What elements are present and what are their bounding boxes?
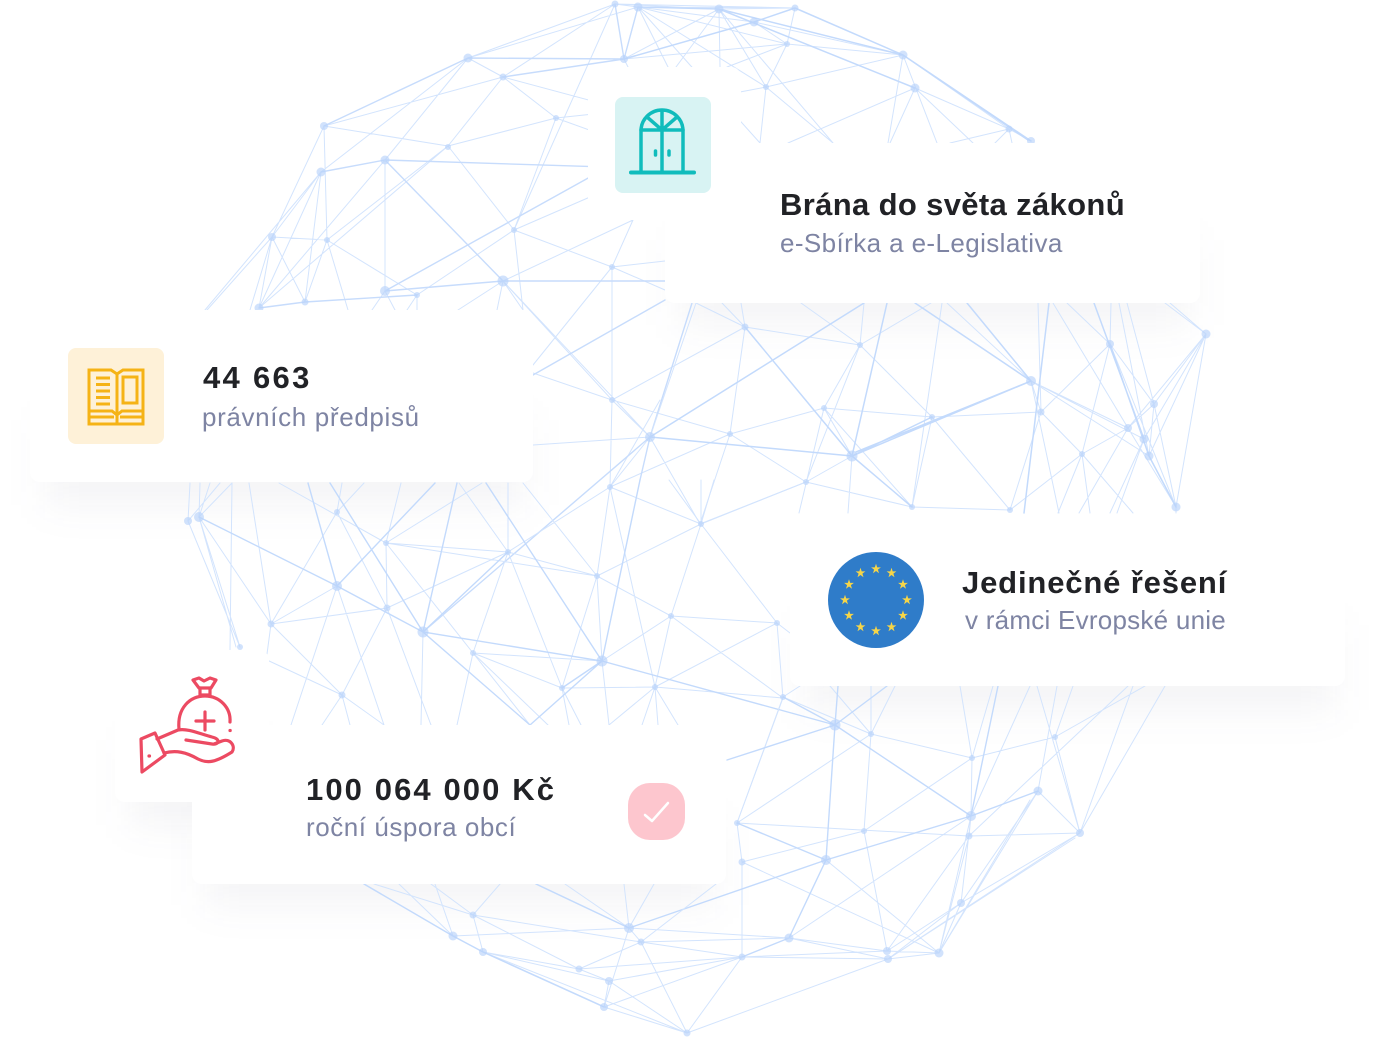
subtext: právních předpisů: právních předpisů [202,402,420,432]
card: 44 663 právních předpisů [30,310,533,482]
heading: Brána do světa zákonů: Brána do světa zákonů [780,187,1125,222]
card: Brána do světa zákonů [665,143,1200,303]
number: 44 663: 44 663 [203,360,312,395]
icon: book [68,348,164,444]
number: 100 064 000 Kč: 100 064 000 Kč [306,772,556,807]
card: money bag icon tile [115,650,269,802]
heading: Jedinečné řešení: Jedinečné řešení [962,565,1227,600]
subtext: roční úspora obcí: roční úspora obcí [306,812,516,842]
icon: check badge [628,783,685,840]
subtext: v rámci Evropské unie: v rámci Evropské unie [965,605,1226,635]
icon: hand with money bag [139,676,235,774]
card: Jedinečné řešení [790,515,1345,686]
card: door icon tile [588,67,741,220]
icon: EU flag circle [828,552,924,648]
card: 100 064 000 Kč [192,725,726,884]
subtext: e-Sbírka a e-Legislativa: e-Sbírka a e-Legislativa [780,228,1063,258]
icon: door [615,97,711,193]
